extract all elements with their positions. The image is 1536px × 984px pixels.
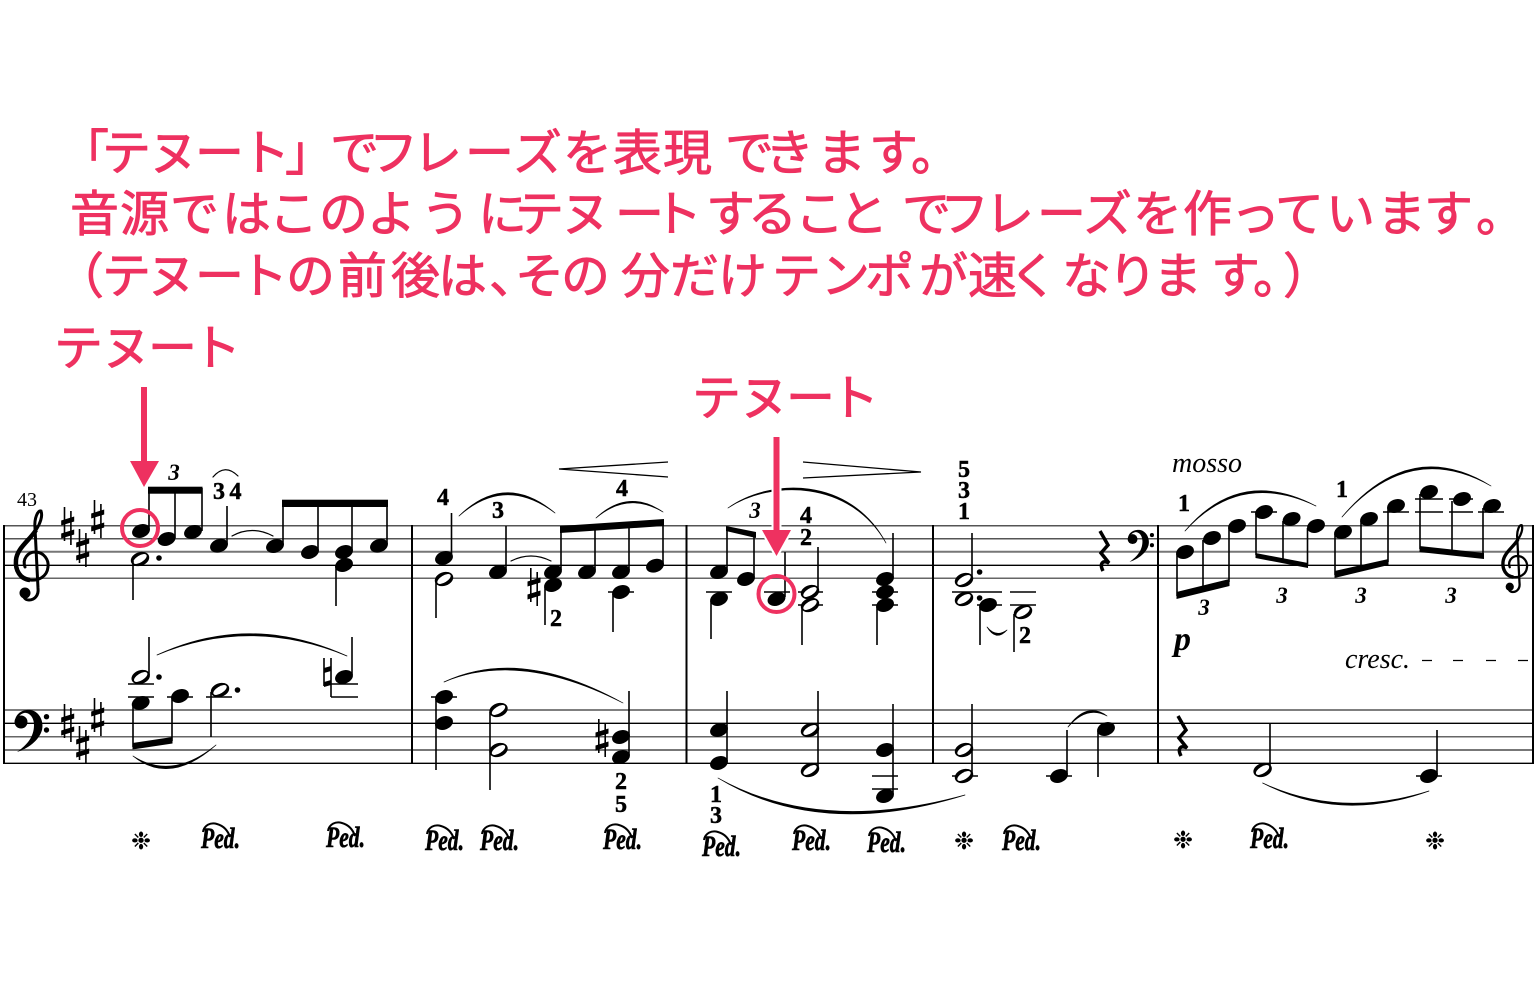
measure 45: treble notes: 2 <box>800 525 812 551</box>
measure 46: treble notes: 1 <box>958 499 970 525</box>
dynamic: piano: p <box>1171 621 1191 658</box>
measure 47: treble notes: 3 <box>1444 583 1457 608</box>
pedal markings: Ped. <box>602 823 642 856</box>
title: explanation text: （テヌートの前後は、その分だけテンポが速くなります。） <box>55 250 1332 304</box>
measure 46: treble notes: 5 <box>958 457 970 483</box>
measure 47: treble notes: 1 <box>1178 491 1190 517</box>
title: explanation text: 音源ではこのようにテヌートすることでフレーズを作っています。 <box>70 188 1525 242</box>
treble clef and key signature <box>16 500 104 600</box>
measure 47: bass notes <box>1178 716 1442 805</box>
label: tenuto right: テヌート <box>692 372 879 426</box>
pedal markings: Ped. <box>1001 824 1041 857</box>
pedal markings: Ped. <box>325 821 365 854</box>
pedal markings: Ped. <box>479 824 519 857</box>
arrow: tenuto right <box>762 437 791 556</box>
measure 43: bass notes <box>128 634 358 769</box>
measure 45: treble notes: 4 <box>800 503 812 529</box>
pedal release stars: ❉ <box>1425 827 1445 855</box>
diminuendo hairpin <box>803 462 921 478</box>
pedal release stars: ❉ <box>131 827 151 855</box>
measure 46: bass notes <box>952 704 1117 786</box>
pedal markings: Ped. <box>866 826 906 859</box>
circle: tenuto note right <box>758 576 794 612</box>
measure 44: treble notes: 4 <box>437 485 449 511</box>
measure 46: treble notes <box>952 457 1154 652</box>
measure 47: treble notes: 3 <box>1197 595 1210 620</box>
pedal markings: Ped. <box>701 830 741 863</box>
measure 47: treble notes: 3 <box>1354 583 1367 608</box>
measure 47: treble notes <box>1172 448 1527 620</box>
pedal markings: Ped. <box>424 824 464 857</box>
measure 43: treble notes <box>129 460 390 606</box>
measure 47: treble notes: 3 <box>1275 583 1288 608</box>
pedal release stars: ❉ <box>954 827 974 855</box>
pedal release stars <box>131 826 1445 855</box>
measure 47: treble notes: 1 <box>1336 477 1348 503</box>
measure 44: treble notes <box>433 476 666 632</box>
label: tenuto left: テヌート <box>54 322 241 376</box>
measure 44: bass notes <box>431 668 632 818</box>
measure 44: bass notes: 5 <box>615 792 627 818</box>
pedal markings: Ped. <box>791 824 831 857</box>
crescendo marking: cresc. <box>1345 644 1410 675</box>
pedal markings: Ped. <box>1249 822 1289 855</box>
measure 44: treble notes: 4 <box>616 476 628 502</box>
title: explanation text <box>55 127 1525 304</box>
measure 45: bass notes: 1 <box>710 782 722 808</box>
bass clef and key signature <box>14 698 104 764</box>
measure 43: treble notes: 4 <box>230 479 242 505</box>
crescendo hairpin <box>559 462 668 477</box>
measure 43: treble notes: 3 <box>213 479 225 505</box>
measure 44: bass notes: 2 <box>615 769 627 795</box>
circle: tenuto note left <box>122 510 158 546</box>
measure 45: treble notes: 3 <box>748 498 761 523</box>
measure 45: bass notes: 3 <box>710 803 722 829</box>
pedal release stars: ❉ <box>1173 826 1193 854</box>
arrow: tenuto left <box>130 387 159 487</box>
measure 47: treble notes: mosso <box>1172 448 1242 479</box>
staff lines <box>4 525 1533 764</box>
pedal markings: Ped. <box>200 822 240 855</box>
measure 44: treble notes: 3 <box>492 498 504 524</box>
measure 44: treble notes: 2 <box>550 606 562 632</box>
measure number: 43 <box>17 489 37 511</box>
measure 46: treble notes: 3 <box>958 478 970 504</box>
measure 45: treble notes <box>706 488 898 645</box>
measure 45: bass notes <box>708 691 965 829</box>
measure 43: treble notes: 3 <box>167 460 180 485</box>
title: explanation text: 「テヌート」でフレーズを表現できます。 <box>60 127 960 181</box>
pedal markings <box>200 821 1289 863</box>
measure 46: treble notes: 2 <box>1019 623 1031 649</box>
